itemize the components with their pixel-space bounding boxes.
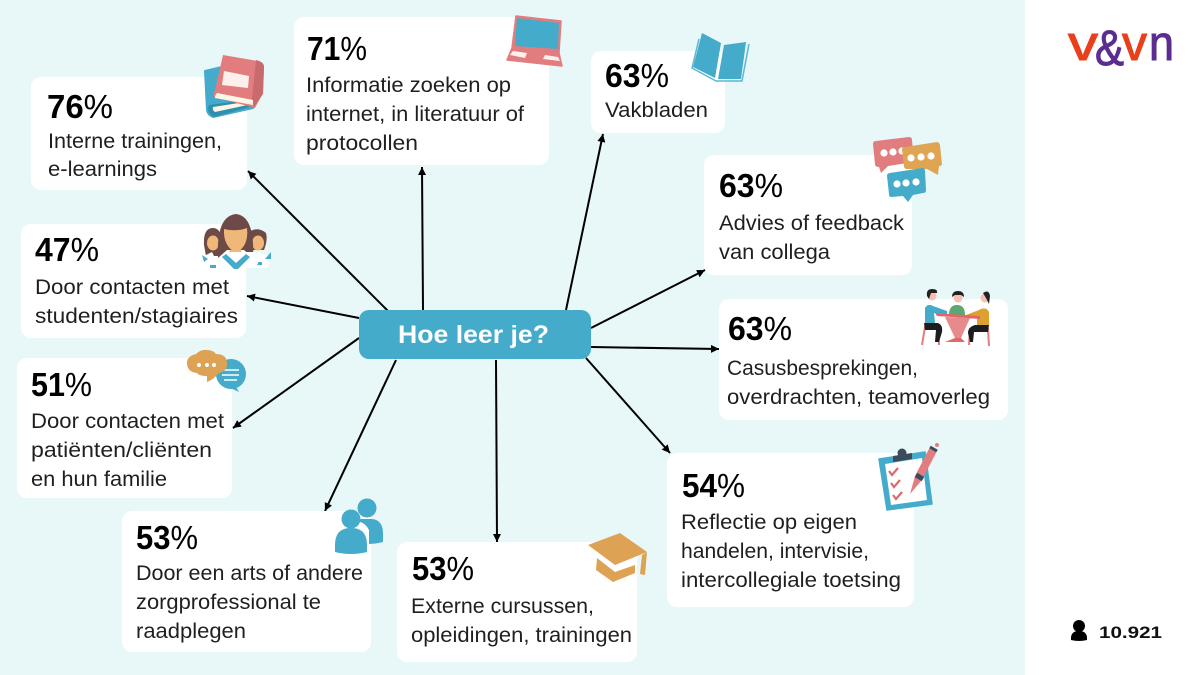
card: patienten 51%: patiënten/cliënten [31,438,212,462]
logo: v&vn: v [1068,17,1099,71]
card: reflectie 54%: handelen, intervisie, [681,539,869,563]
card: patienten 51%: Door contacten met [31,409,224,433]
icon: speech bubbles [873,137,942,202]
arrows from centre to cards [233,134,719,542]
card: studenten 47%: studenten/stagiaires [35,304,238,328]
card: interne trainingen 76% [31,77,247,190]
card: advies van collega 63% [704,155,912,275]
icon: stacked books [205,55,264,117]
card: studenten 47%: 47% [35,231,99,268]
respondent count: 10.921: 10.921 [1099,623,1162,642]
logo: v&vn: & [1095,20,1124,76]
card: arts of zorgprofessional 53%: 53% [136,519,198,556]
icon: laptop [507,16,562,66]
icon: people at table [922,289,990,346]
respondent count: 10.921 [1071,620,1162,642]
centre node: Hoe leer je?: Hoe leer je? [398,321,549,349]
card: advies van collega 63%: Advies of feedback [719,211,904,235]
card: externe cursussen 53%: Externe cursussen, [411,594,594,618]
logo: v&vn [1068,17,1174,76]
card: arts of zorgprofessional 53%: Door een arts of andere [136,561,363,585]
card: reflectie 54%: 54% [682,467,745,504]
card: externe cursussen 53%: 53% [412,550,474,587]
card: casusbesprekingen 63% [719,299,1008,420]
logo: v&vn: n [1149,17,1174,71]
card: vakbladen 63% [591,51,725,133]
card: casusbesprekingen 63%: Casusbesprekingen, [727,356,918,380]
card: informatie zoeken 71%: 71% [307,30,367,67]
icon: chat cloud and bubble [187,350,246,392]
card: vakbladen 63%: Vakbladen [605,98,708,122]
card: informatie zoeken 71%: protocollen [306,131,418,155]
card: interne trainingen 76%: e-learnings [48,157,157,181]
card: externe cursussen 53%: opleidingen, trainingen [411,623,632,647]
card: casusbesprekingen 63%: overdrachten, teamoverleg [727,385,990,409]
card: patienten 51%: en hun familie [31,467,167,491]
card: casusbesprekingen 63%: 63% [728,310,792,347]
icon: care team [202,214,271,269]
card: interne trainingen 76%: Interne trainingen, [48,129,222,153]
card: informatie zoeken 71% [294,17,549,165]
card: reflectie 54%: intercollegiale toetsing [681,568,901,592]
icon: open magazine [692,33,749,81]
card: arts of zorgprofessional 53%: raadplegen [136,619,246,643]
icon: two people [335,498,383,554]
card: interne trainingen 76%: 76% [47,88,113,125]
card: reflectie 54%: Reflectie op eigen [681,510,857,534]
card: advies van collega 63%: 63% [719,167,783,204]
card: patienten 51% [17,358,232,498]
card: reflectie 54% [667,453,914,607]
logo: v&vn: v [1122,17,1148,71]
icon: clipboard and pen [879,443,939,510]
card: vakbladen 63%: 63% [605,57,669,94]
card: informatie zoeken 71%: Informatie zoeken op [306,73,511,97]
centre node: Hoe leer je? [359,310,591,359]
card: externe cursussen 53% [397,542,637,662]
card: advies van collega 63%: van collega [719,240,830,264]
card: studenten 47%: Door contacten met [35,275,229,299]
card: arts of zorgprofessional 53% [122,511,371,652]
card: informatie zoeken 71%: internet, in literatuur of [306,102,524,126]
icon: graduation cap [588,533,647,582]
card: studenten 47% [21,224,246,338]
card: arts of zorgprofessional 53%: zorgprofessional te [136,590,321,614]
card: patienten 51%: 51% [31,366,92,403]
